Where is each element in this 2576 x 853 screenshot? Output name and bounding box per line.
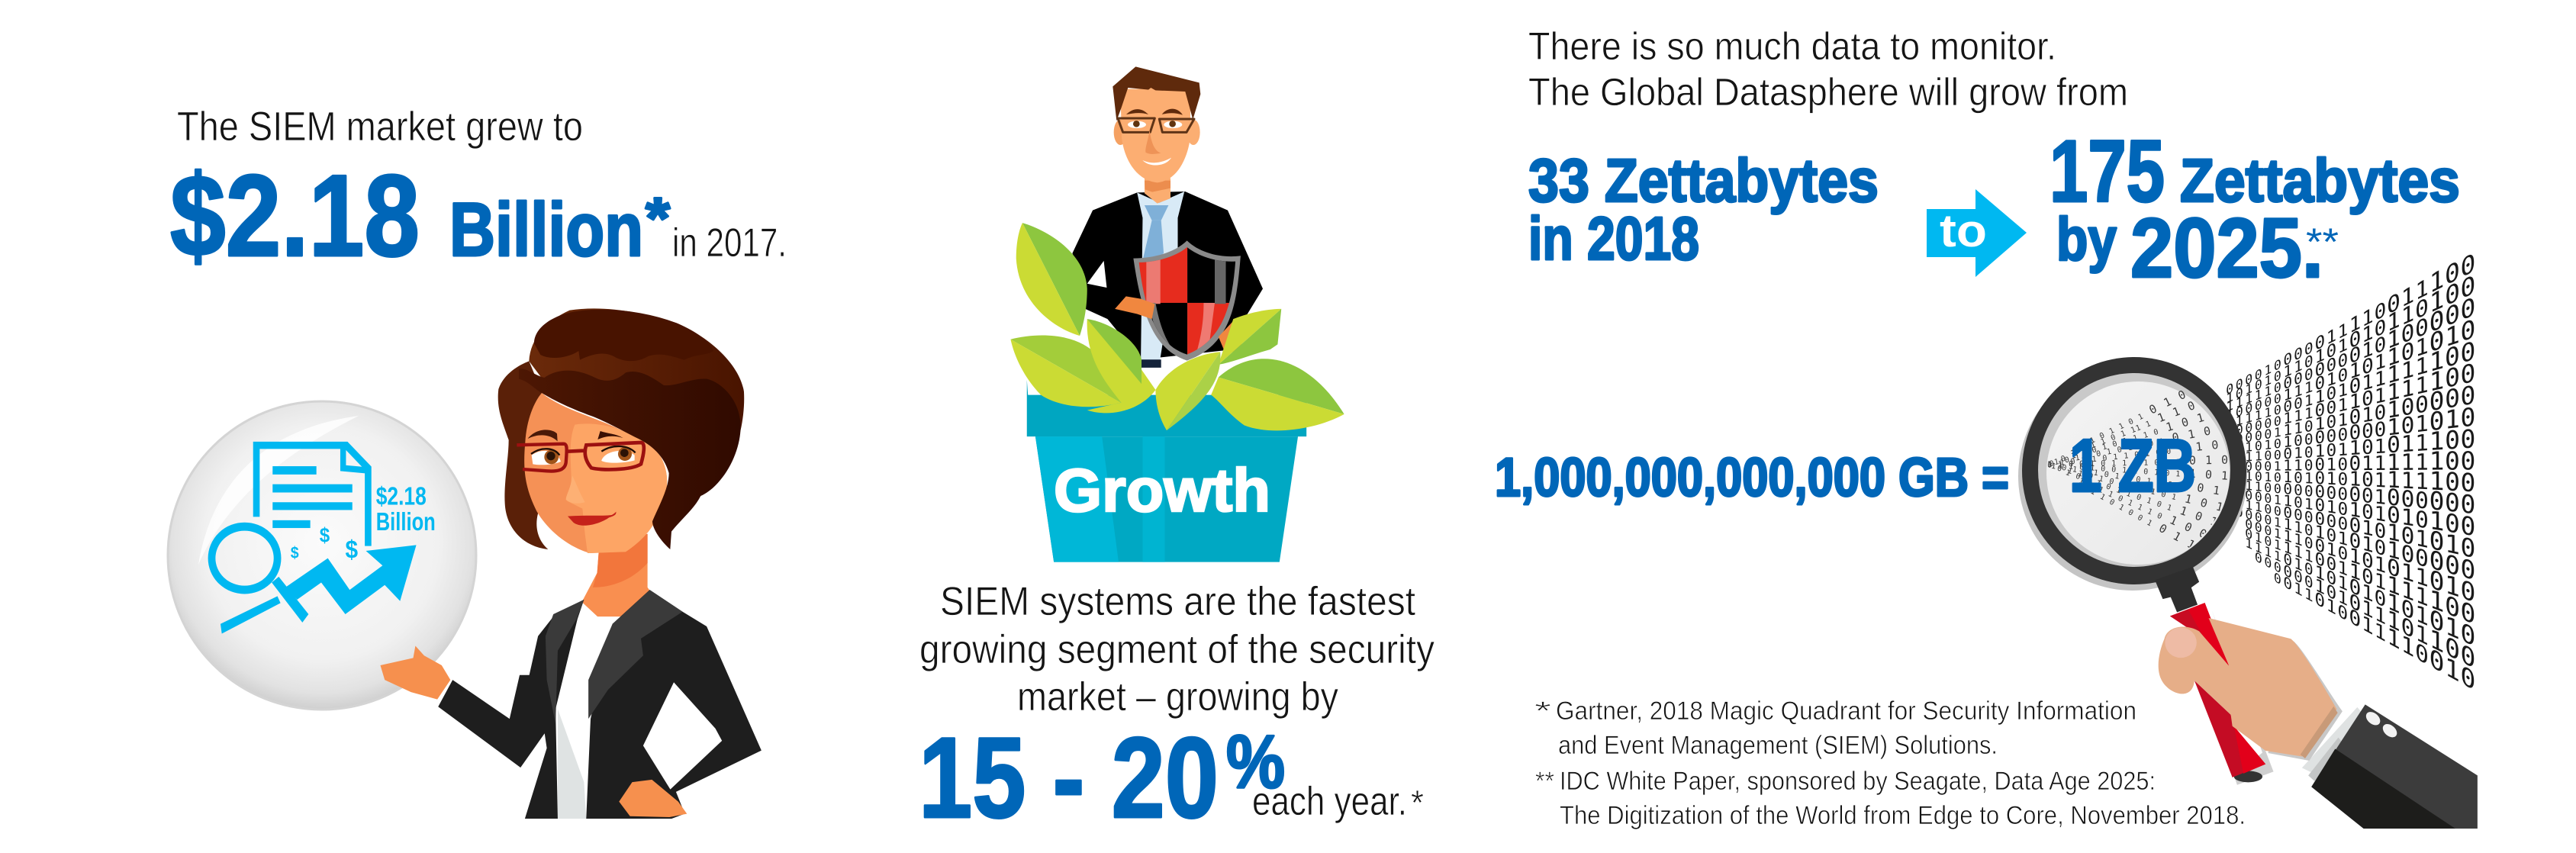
footnotes: The Digitization of the World from Edge to Core, November 2018. [1560,801,2246,830]
panel: growth segment [919,66,1435,842]
chart: binary data stream: 0011010011110010 [2274,558,2476,697]
chart: binary data stream: 111110000000010100000 [2226,291,2476,419]
label: Growth: Growth [1054,456,1270,524]
heading: so much data: There is so much data to monitor. [1528,24,2056,68]
magnifier lens with 1 ZB: 1 0 1 0 1 0 1 1 0 1 1 0 0 0 1 1 0 [2050,458,2254,503]
chart: binary data stream: 101010101010101111100 [2226,455,2476,497]
magnifier lens with 1 ZB: 0 1 1 0 1 0 1 1 0 1 0 1 1 0 1 0 1 [2056,460,2257,523]
big number: $2.18 Billion in 2017: Billion [449,187,643,272]
magnifier lens with 1 ZB: 0 1 1 0 1 0 0 1 1 0 1 0 1 1 0 1 0 1 [2047,456,2262,485]
chart: binary data stream: 100001110101010100000 [2226,379,2476,452]
pot [1027,380,1306,562]
chart: binary data stream: 11100000000010101010 [2236,483,2476,564]
big number: $2.18 Billion in 2017: * [646,186,670,251]
footnotes [1534,697,2246,830]
footnotes: ** [1535,767,1554,796]
chart: binary data stream: 101010110101010110100 [2226,269,2476,410]
footnotes: * [1534,697,1551,726]
leaf top left [1016,223,1087,336]
handle and sleeve [2155,567,2478,829]
magnifier lens with 1 ZB: 1 0 1 1 0 1 1 1 0 1 0 0 1 1 0 [2077,473,2254,562]
chart: binary data stream: 101010100000000101010 [2226,401,2476,460]
footnotes: and Event Management (SIEM) Solutions. [1558,731,1998,760]
chart: binary data stream: 100000111001101111100 [2226,358,2476,443]
stat: 175 Zettabytes by 2025: 2025. [2130,201,2323,295]
heading: so much data [1528,24,2128,114]
magnifier lens with 1 ZB: 1 0 0 1 0 1 1 0 1 0 1 1 0 1 0 0 1 [2064,465,2266,546]
illustration: businessman head [1113,66,1200,204]
chart: binary data stream: 100000111010101101010 [2226,314,2476,426]
panel: SIEM market size [168,104,787,819]
icon: report, magnifier and rising arrow: Billion [376,507,436,536]
stat: 33 Zettabytes in 2018: in 2018 [1528,204,1699,272]
heading: market grew: The SIEM market grew to [177,104,583,150]
arrow: to: to [1940,205,1987,256]
leaf upper right [1219,309,1281,365]
magnifier lens with 1 ZB [2018,357,2247,591]
leaf centre [1155,352,1220,430]
stat: 175 Zettabytes by 2025: 175 [2050,123,2165,220]
text: SIEM systems description [919,579,1435,719]
leaf middle [1087,319,1155,413]
chart: binary data stream: 000010000011110011100 [2226,248,2476,401]
magnifier lens with 1 ZB: 1 0 1 1 0 1 0 1 0 0 1 0 1 0 1 1 0 1 [2053,411,2276,468]
stat: 33 Zettabytes in 2018 [1528,146,1879,272]
stat: 175 Zettabytes by 2025: by [2056,205,2117,273]
big number: 15 - 20% each year: each year. [1252,779,1407,824]
big number: 15 - 20% each year: 15 - 20 [919,713,1219,842]
chart: binary data stream: 111100010101101011100 [2226,423,2476,468]
big number: $2.18 Billion in 2017: in 2017. [672,220,787,266]
chart: binary data stream: 100001101010101010100 [2226,472,2476,542]
label: 1 ZB: 1 ZB [2069,423,2196,507]
leaf right large [1211,359,1344,430]
chart: binary data stream: 00001110101010100000 [2236,492,2476,586]
chart: binary data stream: 111100000000001000000 [2226,464,2476,520]
icon: report, magnifier and rising arrow: $ [291,544,299,562]
magnifier lens with 1 ZB: 1 0 1 1 0 1 11 1 1 1 0 0 1 0 1 1 [2068,369,2273,459]
chart: binary data stream [2226,248,2476,697]
illustration: hand holding magnifying glass [2018,345,2478,829]
chart: binary data stream: 0101111001101111100 [2245,514,2476,631]
chart: binary data stream: 0001110010101011010 [2245,504,2476,608]
magnifier lens with 1 ZB: 0 1 0 1 1 0 1 1 0 1 0 0 0 1 0 1 1 0 [2048,433,2268,469]
illustration: businessman body with shield [1072,192,1263,368]
icon: report, magnifier and rising arrow: $ [346,535,359,564]
magnifier lens with 1 ZB: 1 0 1 1 0 1 0 1 0 1 0 0 1 0 1 [2087,345,2275,446]
magnifier lens with 1 ZB: 0 1 1 0 1 0 1 1 1 0 1 0 1 0 0 1 0 1 [2059,388,2284,465]
stat: 175 Zettabytes by 2025: Zettabytes [2180,146,2460,214]
magnifier lens with 1 ZB: 1 1 0 1 0 0 1 0 1 1 0 1 0 [2088,484,2240,576]
text: SIEM systems description: SIEM systems are the fastest [940,579,1415,624]
leaf left large [1010,336,1121,407]
illustration: leaves and growth pot [1010,223,1344,562]
magnifier lens with 1 ZB: 1 1 0 0 1 0 1 1 0 1 0 1 1 0 1 0 1 1 [2047,452,2262,470]
heading: so much data: The Global Datasphere will grow from [1528,70,2128,114]
panel: Global Datasphere [1495,24,2478,830]
icon: security shield [1133,240,1241,362]
chart: binary data stream: 1111010101010101010 [2245,523,2476,653]
illustration: businesswoman head [498,308,744,553]
big number: $2.18 Billion in 2017 [170,151,787,281]
big number: 15 - 20% each year: % [1226,719,1285,803]
hand [2159,618,2343,761]
equation: 1,000,000,000,000 GB =: 1,000,000,000,000 GB = [1495,448,2009,508]
footnotes: Gartner, 2018 Magic Quadrant for Security Information [1556,697,2136,726]
illustration: businesswoman body [380,534,762,819]
stat: 175 Zettabytes by 2025 [2050,123,2460,295]
stat: 175 Zettabytes by 2025: ** [2306,220,2339,263]
chart: binary data stream: 000000101011101100 [2255,538,2476,675]
illustration: glass bubble with icons [168,401,476,710]
stat: 33 Zettabytes in 2018: 33 Zettabytes [1528,146,1879,214]
icon: report, magnifier and rising arrow [211,446,436,634]
icon: report, magnifier and rising arrow: $ [320,524,330,547]
footnotes: IDC White Paper, sponsored by Seagate, Data Age 2025: [1560,767,2156,796]
text: SIEM systems description: market – growing by [1017,674,1338,719]
icon: report, magnifier and rising arrow: $2.18 [376,481,427,510]
chart: binary data stream: 100001110010011111100 [2226,446,2476,477]
big number: 15 - 20% each year: * [1411,783,1424,822]
text: SIEM systems description: growing segment of the security [919,627,1435,672]
arrow: to [1927,189,2027,277]
big number: $2.18 Billion in 2017: $2.18 [170,151,420,281]
chart: binary data stream: 111110001101011111100 [2226,336,2476,435]
